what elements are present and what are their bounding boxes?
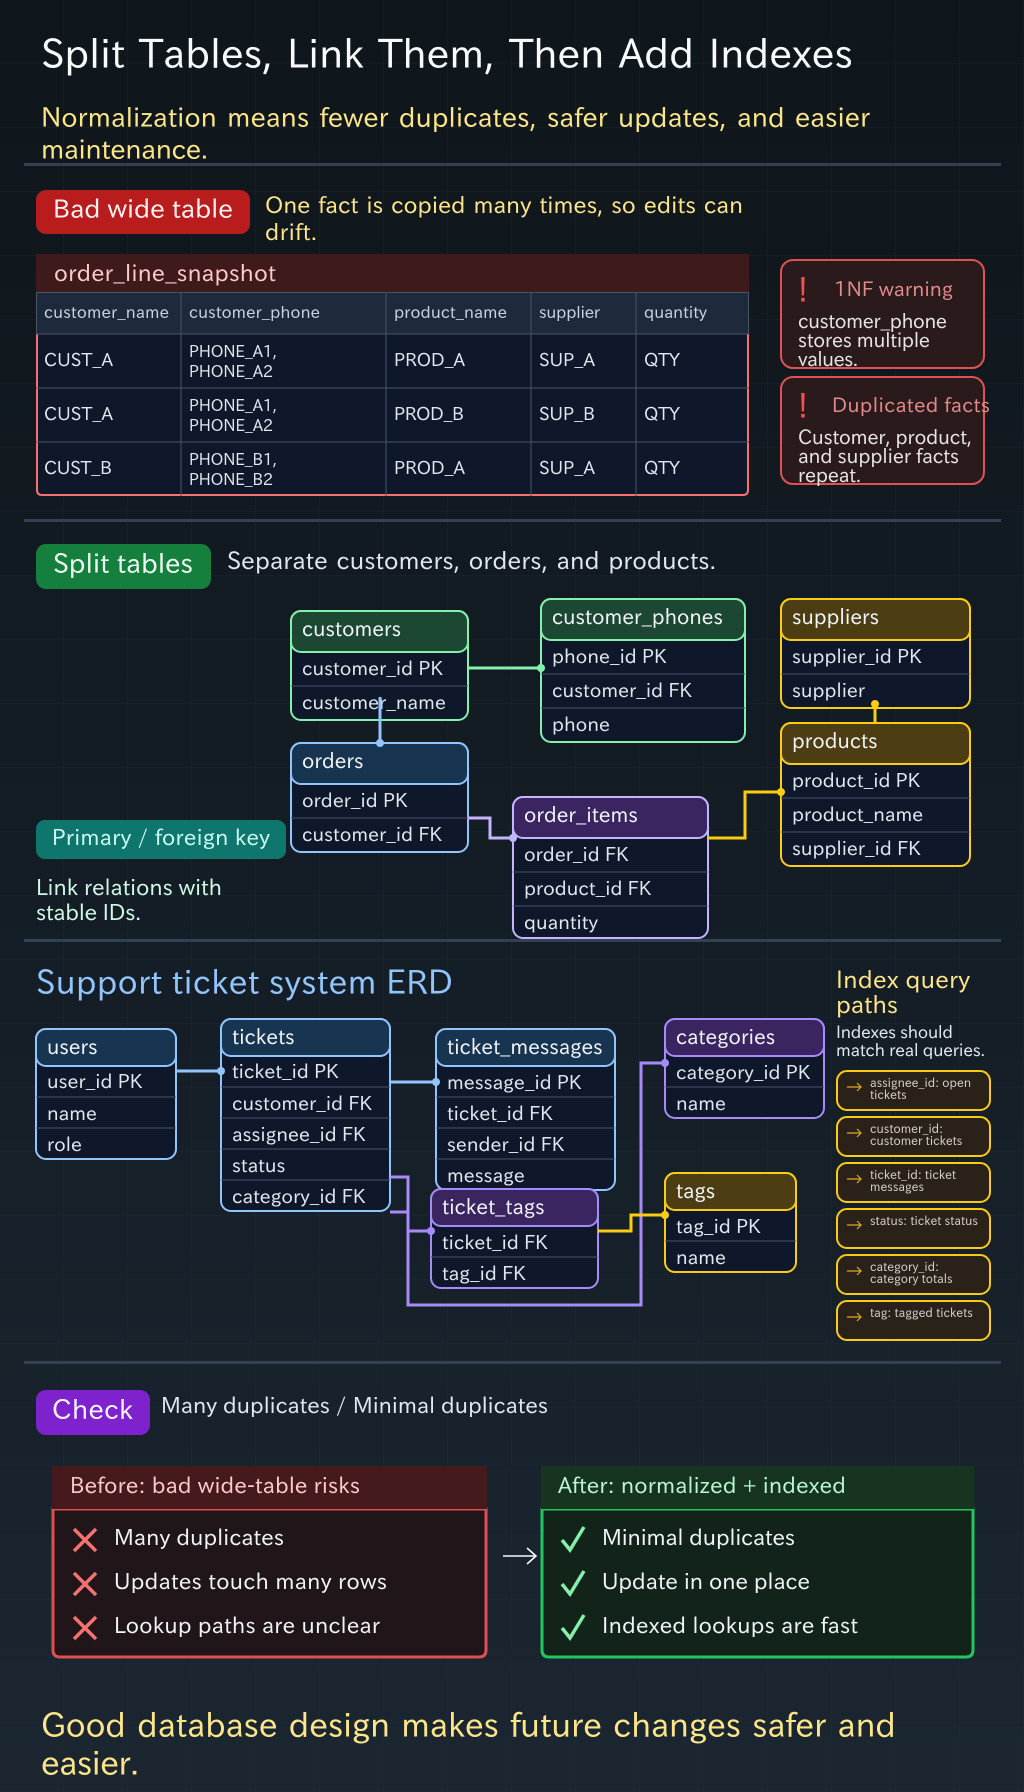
table: order_items: order_id FK [524,845,629,864]
panel: before: Updates touch many rows [114,1570,387,1593]
text: index description [836,1024,985,1059]
conclusion: Good database design makes future changes safer and [41,1708,896,1743]
panel: bad wide table order_line_snapshot: PHONE_A2 [189,417,273,433]
callout: 1NF warning: ! [798,273,808,307]
panel: before: Lookup paths are unclear [114,1614,380,1637]
callout: 1NF warning: 1NF warning [834,279,953,300]
text: index description: match real queries. [836,1042,985,1059]
panel: bad wide table order_line_snapshot: supplier [539,303,600,321]
callout: 1NF warning: stores multiple [798,331,930,351]
table: ticket_tags: ticket_tags [442,1197,545,1218]
index card: ticket_id: messages [870,1181,924,1193]
arrow: ticket_tags to tags [598,1211,669,1231]
panel: bad wide table order_line_snapshot: PHONE_A2 [189,363,273,379]
table: tickets: tickets [232,1027,295,1047]
callout: duplicated facts: Duplicated facts [832,395,990,416]
table: ticket_tags: tag_id FK [442,1264,526,1284]
panel: bad wide table order_line_snapshot: CUST_A [44,351,114,369]
callout: duplicated facts: ! [798,389,808,423]
callout: 1NF warning [781,260,984,369]
table: order_items: order_items [524,805,638,825]
index card: customer_id: customer_id: [870,1123,943,1135]
panel: after [541,1466,974,1657]
text: link relations: Link relations with [36,876,222,898]
arrow: before to after [503,1548,536,1564]
arrow: suppliers to products [871,700,879,723]
heading: index query paths: Index query [836,967,970,993]
text: bad table description [265,193,743,243]
subtitle [41,104,870,163]
table: customer_phones: phone [552,715,610,735]
conclusion: easier. [41,1746,139,1779]
panel: bad wide table order_line_snapshot: PROD_A [394,351,466,369]
table: ticket_tags: ticket_id FK [442,1233,548,1252]
panel: bad wide table order_line_snapshot: quantity [644,303,708,321]
panel: bad wide table order_line_snapshot: customer_phone [189,303,320,321]
table: tickets: customer_id FK [232,1094,372,1113]
table: users: user_id PK [47,1072,143,1091]
text: check description: Many duplicates / Minimal duplicates [161,1394,548,1417]
table: order_items: product_id FK [524,879,652,899]
subtitle: maintenance. [41,136,208,163]
panel: before [52,1466,487,1657]
panel: bad wide table order_line_snapshot: QTY [644,351,681,369]
panel: after: Indexed lookups are fast [602,1614,858,1637]
callout: 1NF warning: customer_phone [798,312,947,332]
table: order_items: quantity [524,913,598,933]
table: ticket_messages: message_id PK [447,1073,582,1093]
icon: cross [74,1529,96,1551]
arrow: tickets to ticket_messages [390,1078,440,1086]
table: ticket_tags [431,1189,598,1288]
arrow: tickets to categories [390,1059,669,1305]
index card: category_id: category totals [870,1273,953,1285]
table: ticket_messages: ticket_messages [447,1037,603,1058]
badge: bad wide table: Bad wide table [53,196,233,222]
table: suppliers: suppliers [792,607,879,628]
callout: duplicated facts: repeat. [798,466,861,486]
panel: after: Update in one place [602,1570,810,1593]
table: orders [291,743,468,852]
text: link relations [36,876,222,923]
table: ticket_messages: ticket_id FK [447,1104,553,1123]
table: customer_phones: customer_phones [552,607,723,628]
heading: index query paths [836,967,970,1018]
table: categories: categories [676,1027,775,1048]
table: customers: customers [302,619,401,639]
heading: index query paths: paths [836,992,898,1018]
panel: bad wide table order_line_snapshot [36,254,749,496]
panel: bad wide table order_line_snapshot: SUP_B [539,405,595,423]
panel: before: Many duplicates [114,1526,284,1549]
table: tickets [221,1019,390,1211]
badge: split tables [36,544,211,589]
panel: bad wide table order_line_snapshot: PHONE_B2 [189,471,273,487]
badge: check [36,1390,150,1435]
text: index description: Indexes should [836,1024,953,1041]
table: tickets: ticket_id PK [232,1062,339,1081]
panel: bad wide table order_line_snapshot: CUST_B [44,459,112,477]
table: ticket_messages: sender_id FK [447,1135,565,1154]
table: customers: customer_id PK [302,659,443,678]
table: tags [665,1173,796,1272]
table: users: users [47,1037,98,1057]
table: tickets: status [232,1156,285,1175]
panel: bad wide table order_line_snapshot: SUP_A [539,459,596,477]
table: suppliers [781,599,970,708]
table: products: product_id PK [792,771,921,791]
text: bad table description: drift. [265,220,317,243]
table: tags: tags [676,1181,715,1202]
table: customers: customer_name [302,693,446,712]
table: customers [291,611,468,720]
table: suppliers: supplier_id PK [792,647,922,667]
index card: category_id: category_id: [870,1261,939,1273]
table: products: supplier_id FK [792,839,921,859]
index card: assignee_id: tickets [870,1089,907,1101]
badge: primary / foreign key: Primary / foreign key [52,826,270,849]
text: link relations: stable IDs. [36,901,141,923]
panel: bad wide table order_line_snapshot: CUST_A [44,405,114,423]
index card: ticket_id: ticket_id: ticket [870,1169,956,1181]
panel: before: Before: bad wide-table risks [70,1474,360,1496]
table: products: products [792,731,878,752]
index card: status: status: ticket status [870,1215,978,1227]
icon: check [562,1527,584,1550]
table: orders: orders [302,751,363,771]
table: ticket_messages: message [447,1166,525,1186]
arrow: order_items to products [708,788,785,838]
panel: bad wide table order_line_snapshot: PHONE_A1, [189,397,277,414]
table: products: product_name [792,805,923,825]
title: Split Tables, Link Them, Then Add Indexes [41,33,853,76]
panel: bad wide table order_line_snapshot: PROD_B [394,405,464,423]
panel: after: Minimal duplicates [602,1526,795,1549]
table: products [781,723,970,866]
icon: cross [74,1617,96,1639]
index card: assignee_id: assignee_id: open [870,1077,971,1089]
arrow: customers to orders [376,697,384,747]
badge: bad wide table [36,190,250,234]
arrow: tickets to ticket_tags [390,1177,435,1235]
index card: assignee_id [837,1071,990,1110]
panel: bad wide table order_line_snapshot: PHONE_A1, [189,343,277,360]
arrow: users to tickets [176,1067,225,1075]
callout: duplicated facts: and supplier facts [798,447,959,467]
subtitle: Normalization means fewer duplicates, safer updates, and easier [41,104,870,132]
index card: status [837,1209,990,1248]
table: users [36,1029,176,1159]
callout: duplicated facts: Customer, product, [798,428,972,448]
table: orders: customer_id FK [302,825,442,844]
panel: bad wide table order_line_snapshot: order_line_snapshot [54,261,276,285]
panel: bad wide table order_line_snapshot: QTY [644,459,681,477]
table: tickets: category_id FK [232,1187,366,1207]
table: customer_phones: customer_id FK [552,681,692,700]
index card: customer_id [837,1117,990,1156]
badge: primary / foreign key [36,820,286,859]
index card: ticket_id [837,1163,990,1202]
callout: duplicated facts [781,377,990,486]
table: categories: category_id PK [676,1063,811,1083]
index card: category_id [837,1255,990,1294]
table: customer_phones: phone_id PK [552,647,667,667]
badge: split tables: Split tables [53,550,193,578]
table: orders: order_id PK [302,791,408,810]
table: tags: name [676,1248,726,1267]
badge: check: Check [52,1396,133,1423]
arrow: customers to customer_phones [468,664,545,672]
callout: 1NF warning: values. [798,350,858,369]
index card: tag [837,1301,990,1340]
index card: tag: tag: tagged tickets [870,1307,973,1319]
heading: support ticket system ERD: Support ticket system ERD [36,965,453,1000]
text: bad table description: One fact is copied many times, so edits can [265,193,743,217]
panel: bad wide table order_line_snapshot: product_name [394,303,507,321]
icon: cross [74,1573,96,1595]
table: categories [665,1019,824,1118]
text: split tables description: Separate customers, orders, and products. [227,548,716,574]
table: suppliers: supplier [792,681,865,701]
panel: bad wide table order_line_snapshot: SUP_A [539,351,596,369]
panel: after: After: normalized + indexed [557,1474,846,1496]
table: categories: name [676,1094,726,1113]
table: users: role [47,1135,82,1154]
arrow: orders to order_items [468,818,517,842]
table: tags: tag_id PK [676,1217,761,1237]
icon: check [562,1615,584,1638]
table: customer_phones [541,599,745,742]
table: users: name [47,1104,97,1123]
panel: bad wide table order_line_snapshot: PHONE_B1, [189,451,277,468]
table: ticket_messages [436,1029,615,1190]
table: tickets: assignee_id FK [232,1125,366,1145]
icon: check [562,1571,584,1594]
panel: bad wide table order_line_snapshot: customer_name [44,303,169,320]
table: order_items [513,797,708,938]
panel: bad wide table order_line_snapshot: QTY [644,405,681,423]
conclusion [41,1708,896,1779]
index card: customer_id: customer tickets [870,1135,962,1147]
panel: bad wide table order_line_snapshot: PROD_A [394,459,466,477]
